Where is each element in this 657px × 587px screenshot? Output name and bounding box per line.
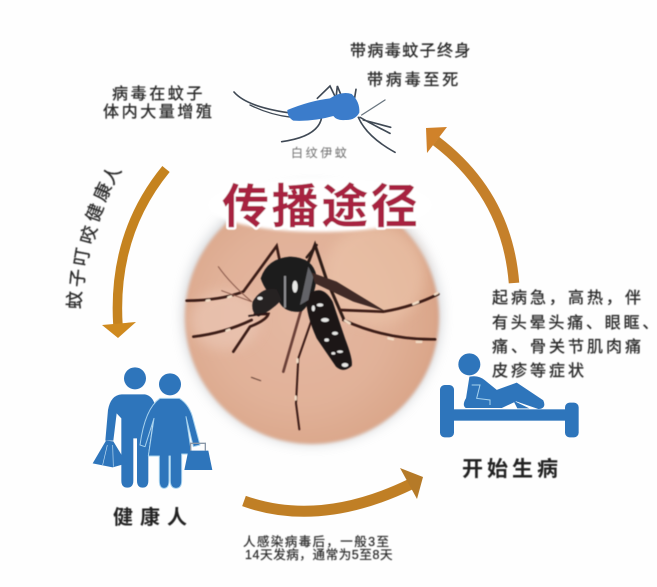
caption: virus multiplies in mosquito — [103, 85, 215, 121]
label: Aedes albopictus: 白纹伊蚊 — [291, 145, 349, 160]
white markings — [257, 276, 348, 367]
caption: carries virus for life: 带病毒蚊子终身 — [350, 42, 472, 60]
caption: symptoms — [492, 289, 657, 380]
caption: symptoms: 痛、骨关节肌肉痛 — [492, 338, 644, 356]
woman — [159, 373, 181, 395]
curved caption: mosquito bites healthy person: 健 — [83, 201, 107, 225]
man — [93, 367, 155, 488]
curved caption: mosquito bites healthy person: 叮 — [71, 246, 93, 268]
arrow: healthy person to illness — [244, 468, 423, 511]
arrow: illness to mosquito — [426, 127, 514, 283]
thorax — [261, 257, 317, 312]
caption: symptoms: 皮疹等症状 — [492, 362, 587, 380]
caption: carries virus for life: 带病毒至死 — [367, 71, 461, 89]
caption: symptoms: 起病急，高热，伴 — [492, 289, 644, 307]
curved caption: mosquito bites healthy person: 子 — [67, 268, 89, 288]
caption: symptoms: 有头晕头痛、眼眶、 — [492, 314, 657, 332]
icon: healthy people — [93, 367, 212, 488]
head — [252, 289, 282, 317]
icon: sick person in bed — [440, 353, 579, 437]
white leg bands — [207, 293, 438, 399]
label: falling ill: 开始生病 — [462, 458, 562, 481]
curved caption: mosquito bites healthy person: 咬 — [77, 224, 101, 246]
arrow: mosquito to healthy person — [102, 169, 166, 338]
abdomen — [306, 290, 352, 370]
label: healthy person: 健康人 — [113, 505, 194, 529]
curved caption: mosquito bites healthy person: 蚊 — [65, 291, 85, 309]
caption: incubation period: 14天发病，通常为5至8天 — [245, 547, 393, 562]
curved caption: mosquito bites healthy person — [65, 162, 125, 309]
icon: blue mosquito — [234, 86, 395, 152]
caption: incubation period: 人感染病毒后，一般3至 — [243, 534, 390, 549]
caption: carries virus for life — [350, 42, 472, 89]
wing — [312, 273, 386, 312]
curved caption: mosquito bites healthy person: 人 — [99, 162, 125, 188]
caption: virus multiplies in mosquito: 病毒在蚊子 — [112, 85, 205, 103]
title: 传播途径 — [222, 180, 420, 233]
handbag right — [184, 451, 212, 470]
central skin circle with mosquito photo — [183, 186, 441, 444]
shopping bag left — [93, 441, 127, 467]
caption: virus multiplies in mosquito: 体内大量增殖 — [103, 103, 215, 121]
curved caption: mosquito bites healthy person: 康 — [90, 180, 116, 204]
mosquito photo — [187, 245, 438, 429]
caption: incubation period — [243, 534, 393, 562]
legs — [187, 246, 282, 301]
